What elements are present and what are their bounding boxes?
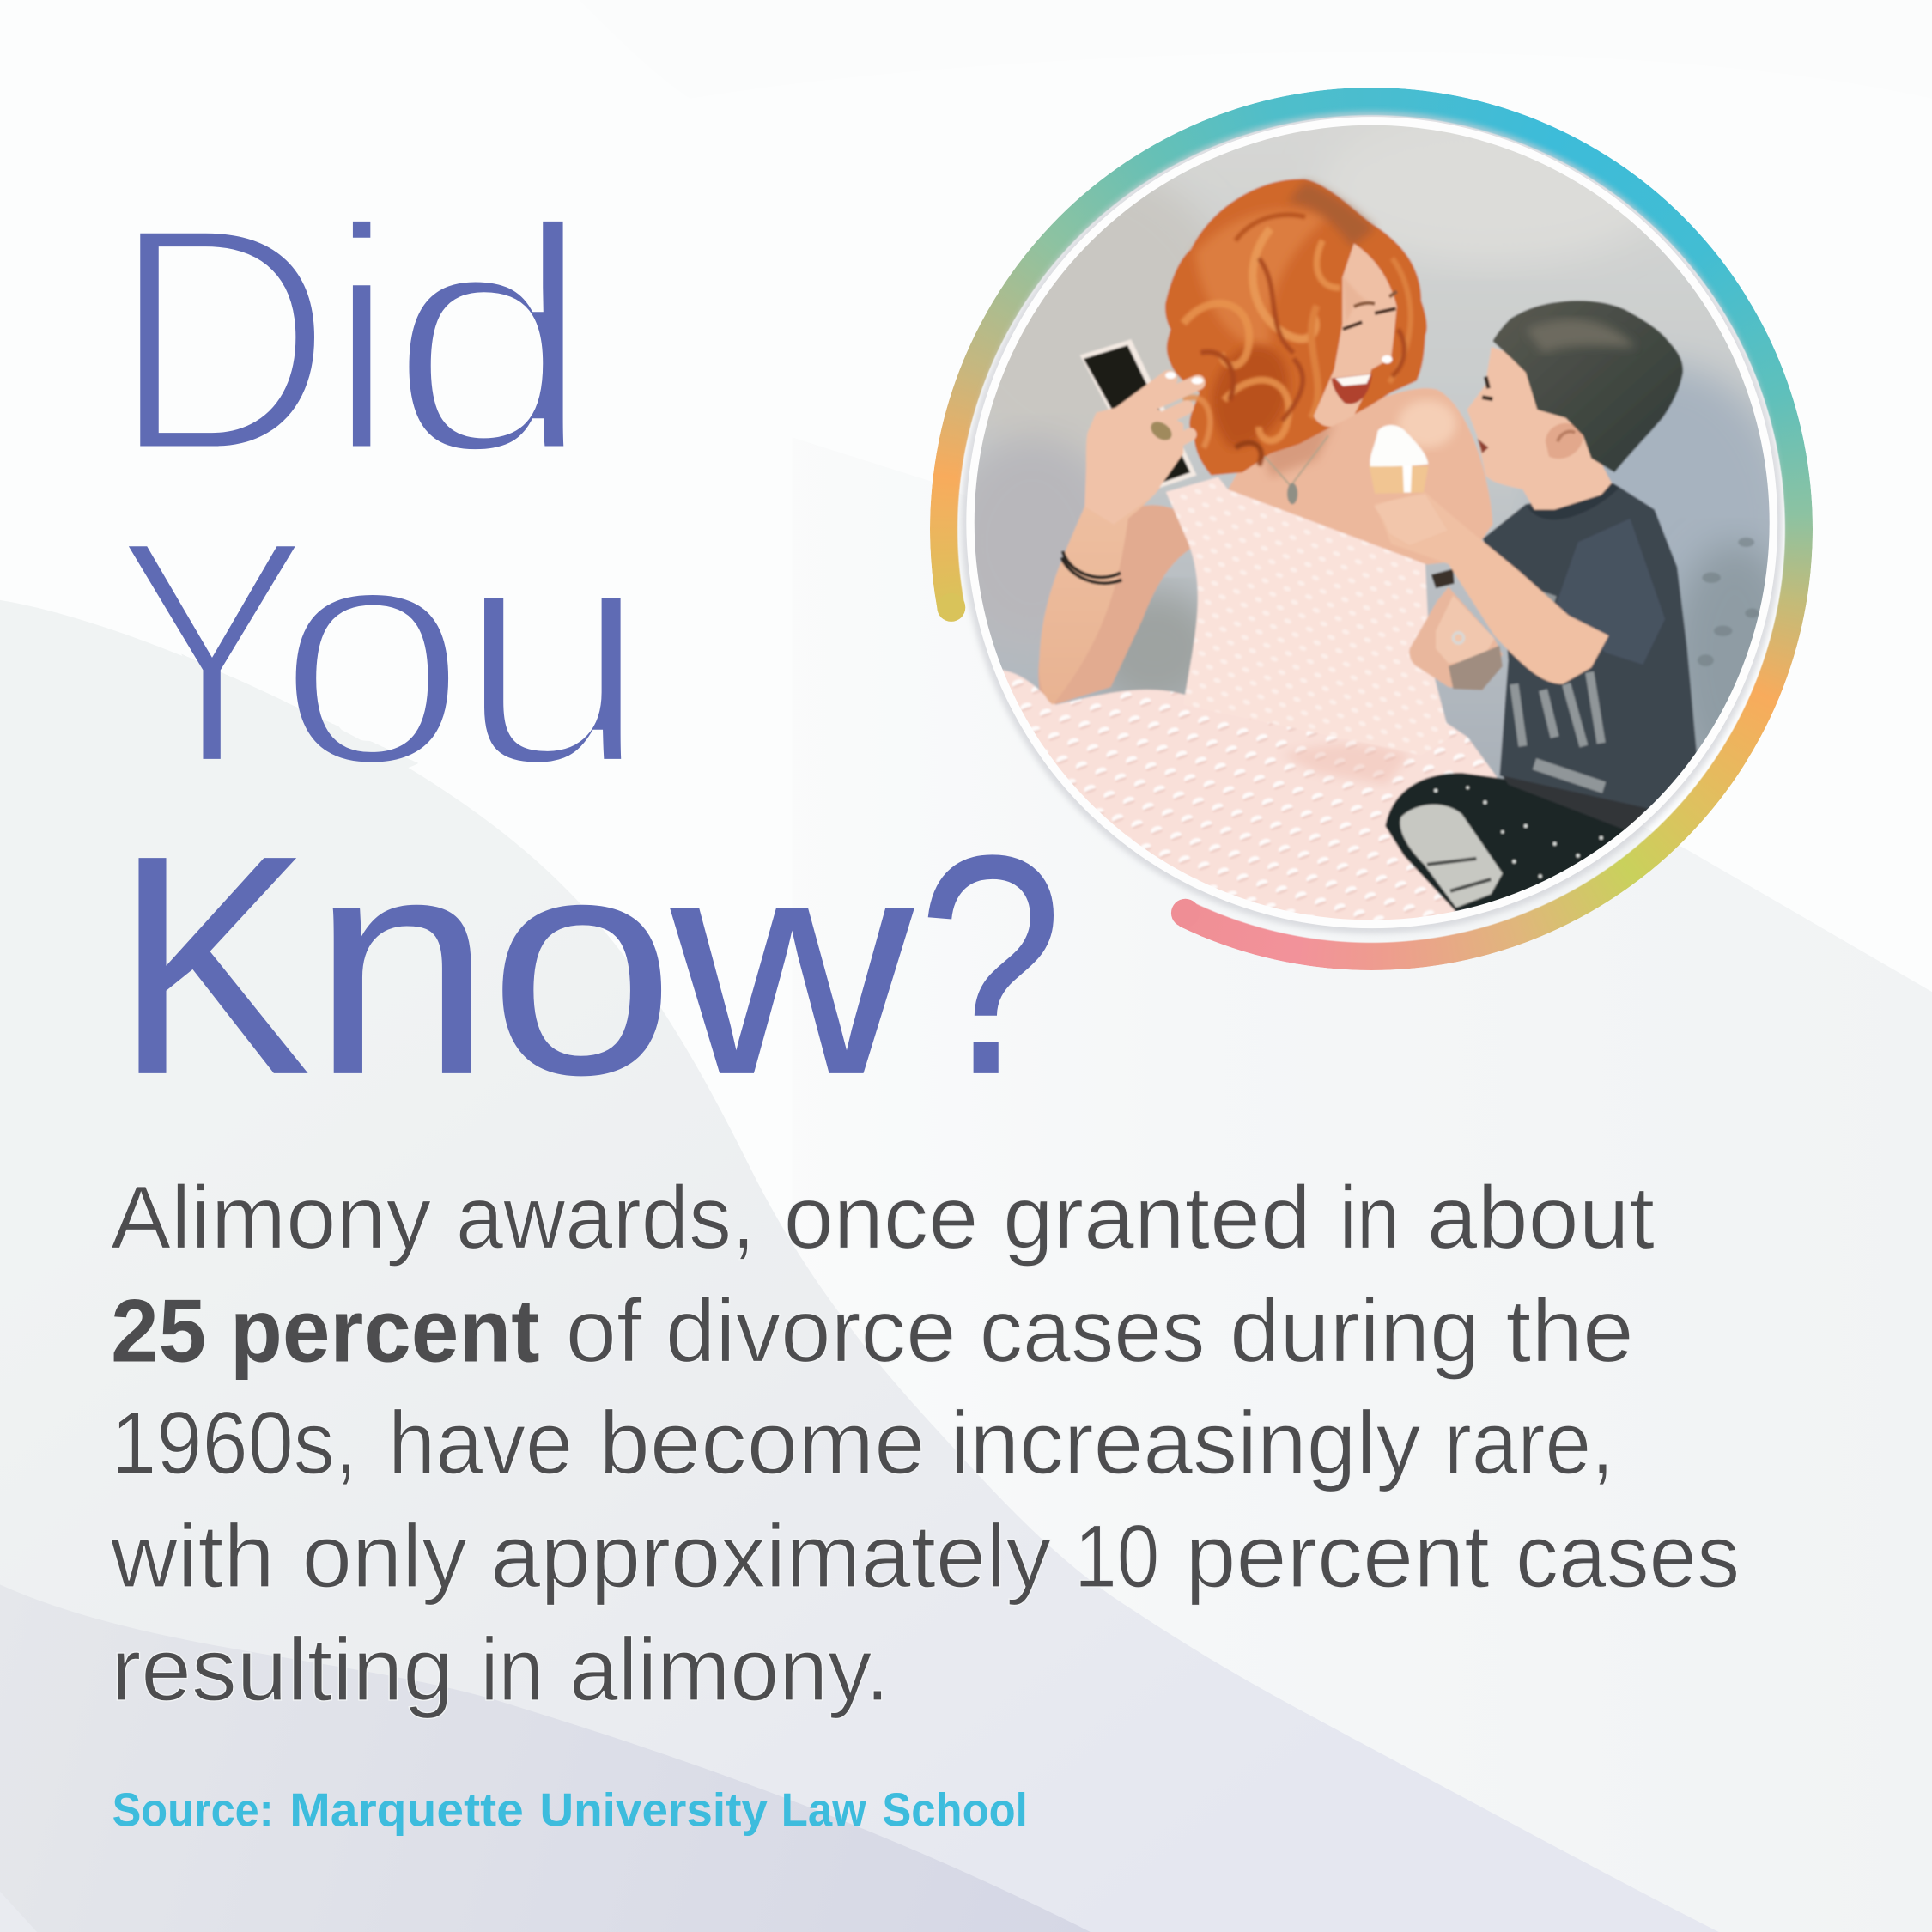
line 2: during [1230,1282,1479,1382]
woman's wrist tattoo [1449,646,1503,690]
title line: Did [109,158,594,521]
title line: You: o [276,471,469,834]
line 5: alimony. [569,1620,890,1720]
title line: Know?: ? [917,791,1063,1140]
line 2: of [566,1282,643,1382]
photo content [974,125,1770,920]
stormtrooper knee print [1400,805,1503,908]
source: Law [781,1784,866,1837]
title line: Did: D [109,158,335,521]
photo backdrop [974,125,1770,912]
hand fingers [1084,372,1203,525]
line 5: resulting [111,1620,453,1720]
ice cream [1369,425,1428,494]
title line: Know?: n [311,791,492,1140]
title line: Know?: o [489,791,675,1140]
line 3: become [598,1394,926,1493]
body text [110,1169,1740,1720]
ring end cap: left [937,593,965,622]
circular photo: mother and son with ice cream [933,99,1804,951]
hands clasped [1409,587,1503,690]
line 1: Alimony [111,1169,431,1268]
dress bodice [1166,477,1450,755]
line 2 [111,1282,1634,1382]
far arm behind body [1038,505,1204,708]
title line: You: u [456,471,651,834]
phone [1080,339,1197,490]
line 3: have [388,1394,573,1493]
gradient ring around photo [930,88,1813,970]
chest and neck [1228,388,1492,565]
t-shirt [1483,487,1697,814]
line 5: in [481,1620,544,1720]
line 1: granted [1003,1169,1311,1268]
title line: You [112,471,651,834]
line 4: with [110,1507,275,1607]
source: School [882,1784,1028,1837]
forearm holding phone [1039,438,1160,705]
pants [1385,773,1642,912]
ice cream on nose [1382,355,1392,363]
source [112,1784,1028,1837]
title line: You: Y [112,471,311,834]
line 3: rare, [1444,1394,1614,1493]
ring on woman's fingers [1453,633,1464,643]
source: Marquette [289,1784,524,1837]
ring end cap: bottom [1171,899,1200,927]
necklace [1265,435,1328,486]
dark bracelet [1431,568,1455,588]
boy's arm [1374,493,1608,684]
mouth [1331,374,1372,404]
line 5 [111,1620,890,1720]
line 2: divorce [665,1282,957,1382]
line 4: only [302,1507,467,1607]
title line: Did: d [387,158,594,521]
title line: Know?: K [114,791,311,1140]
hair [1165,179,1427,476]
title line: Did: i [325,158,398,521]
line 4: cases [1516,1507,1740,1607]
hair [1492,301,1683,472]
line 1 [111,1169,1655,1268]
gold ring [1150,421,1173,441]
bracelet [1061,551,1121,583]
title line: Know?: w [665,791,918,1140]
line 1: once [784,1169,978,1268]
woman [969,179,1503,939]
dress skirt [1003,669,1498,920]
line 4: percent [1185,1507,1490,1607]
line 3 [111,1394,1614,1493]
line 2: 25 percent [111,1282,540,1382]
line 1: about [1427,1169,1655,1268]
head [1467,347,1612,509]
title [109,158,1063,1140]
line 2: the [1506,1282,1634,1382]
line 3: increasingly [950,1394,1420,1493]
eyes and brows [1343,308,1395,329]
line 4: approximately [490,1507,1051,1607]
source: Source: [112,1784,274,1837]
t-shirt print [1514,592,1604,787]
boy [1369,301,1697,912]
line 2: cases [980,1282,1205,1382]
line 3: 1960s, [111,1394,357,1493]
white photo frame [961,112,1783,933]
line 4 [110,1507,1740,1607]
boy's fingers around cone [1374,495,1448,545]
title line: Know? [114,791,1063,1140]
line 1: awards, [456,1169,756,1268]
source: University [540,1784,769,1837]
face [1314,244,1397,427]
line 1: in [1340,1169,1400,1268]
line 4: 10 [1074,1507,1159,1607]
